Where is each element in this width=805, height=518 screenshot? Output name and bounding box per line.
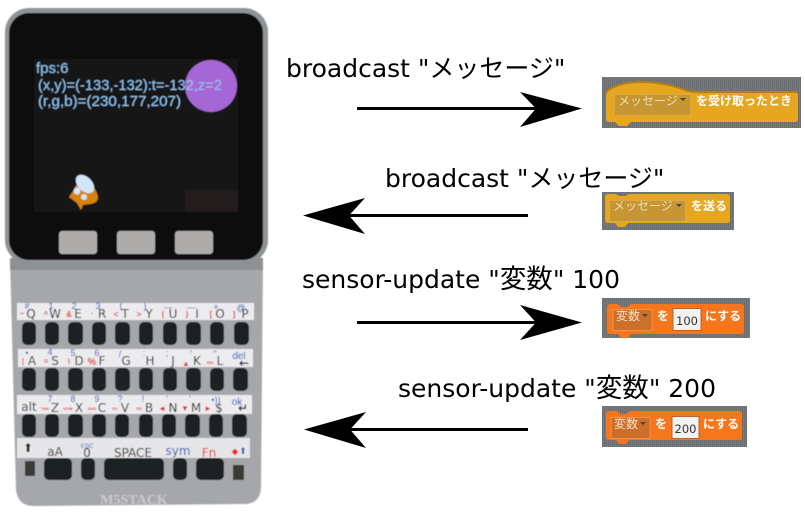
input 100 xyxy=(673,308,701,330)
keyboard row 4 labels: ⬆ xyxy=(239,446,247,456)
keyboard row 3 labels xyxy=(17,394,252,415)
keyboard row 3 labels: alt xyxy=(21,400,37,414)
input 200: 200 xyxy=(675,422,696,436)
keyboard row 2 labels: / xyxy=(119,349,122,359)
keyboard row 1 labels: @ xyxy=(236,303,246,313)
keyboard row 1 labels: · xyxy=(91,309,93,318)
hardware buttons xyxy=(59,231,213,254)
keyboard row 2 labels: S xyxy=(51,354,59,368)
keyboard row 1 labels: ^ xyxy=(44,310,49,319)
keyboard row 3 labels: PU xyxy=(112,406,118,411)
keyboard row 2 labels: 6 xyxy=(94,348,100,358)
label: broadcast receive: broadcast "メッセージ" xyxy=(286,54,565,83)
keyboard row 3 labels: 9 xyxy=(94,394,100,404)
block: set variable 100 xyxy=(602,298,750,338)
keyboard row 2 labels: 5 xyxy=(70,348,76,358)
scratch cat sprite xyxy=(69,171,98,210)
keyboard row 4 labels: Fn xyxy=(202,446,216,460)
keyboard row 3 labels: •)) xyxy=(211,395,221,405)
keyboard row 3 labels: 7 xyxy=(47,394,53,404)
keycaps xyxy=(22,322,249,480)
keyboard row 1 labels: ) xyxy=(144,301,146,311)
dropdown: 変数 xyxy=(614,415,638,432)
keyboard row 2 labels: | xyxy=(22,357,24,366)
keyboard row 2 labels: J xyxy=(170,354,175,368)
keyboard row 3 labels: M xyxy=(191,401,201,415)
keyboard row 1 labels: Q xyxy=(26,307,36,321)
keyboard row 1 labels: I xyxy=(195,307,199,321)
keyboard row 3 labels: ► xyxy=(204,404,212,413)
keyboard row 1 labels: — xyxy=(164,302,172,312)
keyboard row 4 labels: ◆ xyxy=(231,447,239,456)
screen text: fps:6 xyxy=(36,60,69,77)
keyboard row 2 labels: L xyxy=(217,354,224,368)
block: set variable 200 xyxy=(602,406,747,447)
keyboard row 1 labels: < xyxy=(114,310,119,319)
keyboard row 3 labels: END xyxy=(88,406,96,411)
arrow: right 3 xyxy=(357,305,582,340)
keyboard row 2 labels: ; xyxy=(166,348,168,358)
M5STACK logo: M5STACK xyxy=(100,493,168,508)
block: set variable 200: にする xyxy=(703,415,739,432)
keyboard row 3 labels: X xyxy=(75,401,83,415)
label: sensor-update 100: sensor-update "変数" 100 xyxy=(302,264,620,295)
keyboard row 1 labels: ( xyxy=(162,310,165,319)
keyboard row 4 labels: ⬆ xyxy=(23,441,33,455)
keyboard row 2 labels: G xyxy=(121,354,131,368)
keyboard row 3 labels: ' xyxy=(189,394,191,404)
keyboard row 2 labels: H xyxy=(145,354,155,368)
keyboard row 2 labels: INS xyxy=(207,360,214,365)
keyboard row 1 labels: 3 xyxy=(95,301,101,311)
keyboard row 3 labels: C xyxy=(98,401,106,415)
keyboard row 1 labels: 1 xyxy=(48,301,54,311)
keyboard row 1 labels: R xyxy=(98,307,106,321)
keyboard row 3 labels: Z xyxy=(51,401,59,415)
keyboard row 3 labels: ◄ xyxy=(158,404,166,413)
keyboard row 3 labels: N xyxy=(169,401,177,415)
keyboard row 1 labels: U xyxy=(169,307,177,321)
block: receive message hat xyxy=(602,77,801,128)
arrow: left 4 xyxy=(304,412,528,448)
keyboard row 1 labels: # xyxy=(24,301,30,311)
block: set variable 200: を xyxy=(655,415,667,432)
label: sensor-update 200: sensor-update "変数" 200 xyxy=(398,373,716,404)
keyboard row 3 labels: ↵ xyxy=(238,401,248,415)
keyboard row 1 labels: > xyxy=(137,310,142,319)
keyboard row 1 labels: Y xyxy=(144,307,153,321)
M5Stack core unit xyxy=(5,8,268,264)
keyboard body xyxy=(10,258,263,508)
keyboard row 3 labels: ! xyxy=(142,394,144,404)
keyboard row 2 labels: del xyxy=(232,351,246,362)
keyboard row 3 labels: HOM xyxy=(63,406,73,411)
keyboard row 2 labels: = xyxy=(44,357,49,366)
dropdown xyxy=(611,415,650,438)
block: receive message hat: を受け取ったとき xyxy=(696,92,792,109)
dropdown xyxy=(613,307,652,330)
label: broadcast send: broadcast "メッセージ" xyxy=(385,164,664,193)
keyboard row 2 labels: \ xyxy=(68,357,71,366)
purple circle xyxy=(185,60,237,112)
keyboard row 2 labels: A xyxy=(28,354,37,368)
screen text xyxy=(36,60,222,110)
keyboard row 4 labels: SPACE xyxy=(114,446,152,460)
keyboard row 1 labels: & xyxy=(66,310,72,319)
keyboard row 4 labels: 0 xyxy=(83,446,91,460)
keyboard row 1 labels: ] xyxy=(233,310,236,319)
keyboard row 4 labels: aA xyxy=(47,445,64,459)
dropdown xyxy=(614,92,690,116)
keyboard row 2 labels xyxy=(18,347,253,370)
keyboard row 1 labels: T xyxy=(120,307,129,321)
input 200 xyxy=(672,416,699,438)
keyboard row 1 labels: − xyxy=(20,309,25,318)
keyboard row 2 labels: : xyxy=(143,348,145,358)
keyboard row 2 labels: ← xyxy=(239,356,249,370)
keyboard row 3 labels: TAB xyxy=(41,406,49,411)
screen text: (r,g,b)=(230,177,207) xyxy=(38,93,181,110)
keyboard row 3 labels: V xyxy=(121,401,130,415)
keyboard row 1 labels: ( xyxy=(120,301,122,311)
keyboard row 2 labels: % xyxy=(88,357,97,368)
keyboard row 2 labels: 4 xyxy=(47,347,53,357)
block: send message: を送る xyxy=(691,197,727,214)
block: set variable 100: にする xyxy=(705,307,741,324)
keyboard row 3 labels: ▼ xyxy=(181,404,189,413)
keyboard row 2 labels: F xyxy=(99,354,106,368)
keyboard row 2 labels: " xyxy=(213,349,217,359)
keyboard row 1 labels: E xyxy=(74,307,82,321)
keyboard row 4 labels: ESC xyxy=(81,444,94,450)
block: send message xyxy=(602,192,734,230)
keyboard row 3 labels: ? xyxy=(117,394,123,404)
keyboard row 1 labels: ) xyxy=(186,310,189,319)
LCD screen xyxy=(34,59,238,212)
dropdown: メッセージ xyxy=(618,92,678,109)
keyboard row 3 labels: ok xyxy=(232,397,243,408)
keyboard row 1 labels: — xyxy=(186,302,196,312)
keyboard row 2 labels: D xyxy=(74,354,84,368)
keyboard row 3 labels: $ xyxy=(215,401,223,415)
keyboard row 4 labels: sym xyxy=(165,444,191,458)
keyboard row 2 labels: ' xyxy=(190,349,192,359)
keyboard row 3 labels: 8 xyxy=(70,394,76,404)
keyboard row 1 labels: 2 xyxy=(71,301,77,311)
keyboard row 1 labels: W xyxy=(49,307,61,321)
keyboard row 2 labels: • xyxy=(25,348,29,358)
keyboard row 4 labels xyxy=(17,438,250,460)
arrow: right 1 xyxy=(357,92,582,127)
keyboard row 1 labels: O xyxy=(215,307,225,321)
arrow: left 2 xyxy=(303,198,528,234)
keyboard row 3 labels: PD xyxy=(136,406,142,411)
keyboard row 2 labels: K xyxy=(193,354,202,368)
block: set variable 100: を xyxy=(657,307,669,324)
device photo: M5Stack with keyboard xyxy=(5,8,268,508)
keyboard row 3 labels: B xyxy=(145,401,153,415)
keyboard row 3 labels: ' xyxy=(166,394,168,404)
keyboard row 1 labels: + xyxy=(213,302,219,312)
keyboard row 1 labels: [ xyxy=(210,310,213,319)
keyboard row 1 labels: P xyxy=(241,307,249,321)
dropdown: メッセージ xyxy=(613,197,673,214)
screen text: (x,y)=(-133,-132):t=-132,z=2 xyxy=(38,77,222,94)
dropdown: 変数 xyxy=(616,307,640,324)
keyboard row 1 labels xyxy=(17,301,254,321)
keyboard row 2 labels: ▲ xyxy=(182,359,190,368)
input 100: 100 xyxy=(676,314,698,328)
